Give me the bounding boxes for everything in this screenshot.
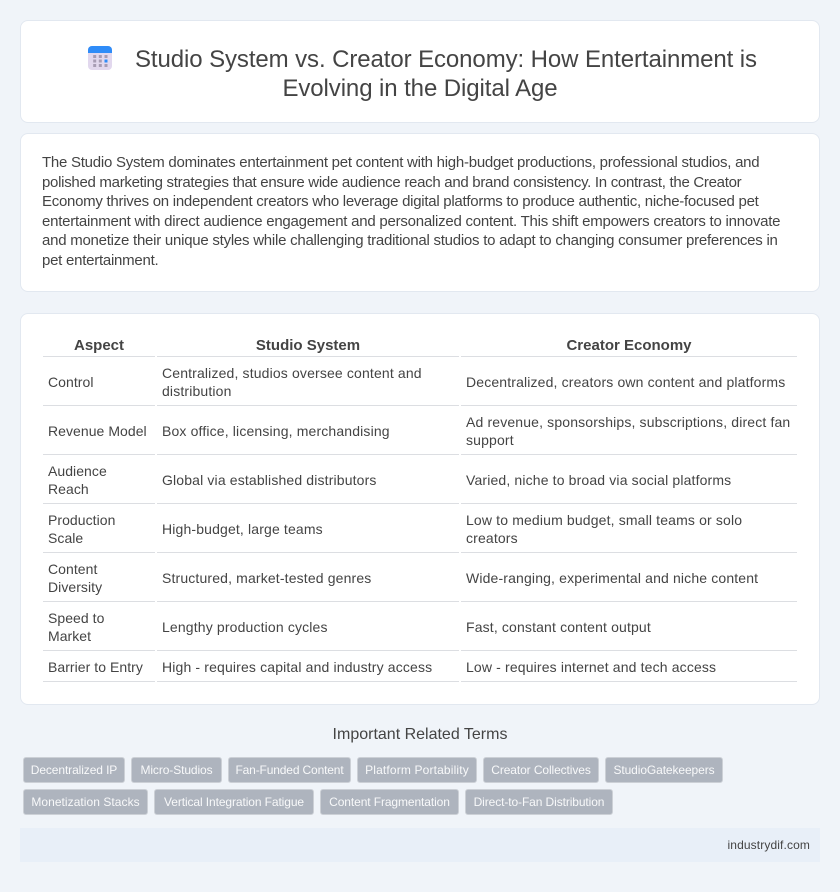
comparison table: Studio System xyxy=(256,337,360,354)
comparison table: Creator Economy xyxy=(566,337,692,354)
comparison table: Varied, niche to broad via social platforms xyxy=(466,472,731,488)
comparison table: support xyxy=(466,432,514,448)
comparison table: Fast, constant content output xyxy=(466,618,651,634)
comparison table: Box office, licensing, merchandising xyxy=(162,422,390,438)
intro paragraph: and monetize their unique styles while challenging traditional studios to adapt to changing consumer preferences in xyxy=(42,232,778,249)
comparison table: Aspect xyxy=(74,337,124,354)
intro paragraph: pet entertainment. xyxy=(42,252,158,268)
heading: related terms: Important Related Terms xyxy=(333,726,507,743)
title xyxy=(135,46,757,102)
tag group: related terms: StudioGatekeepers xyxy=(613,763,715,777)
comparison table: Content xyxy=(48,560,97,576)
comparison table: Structured, market-tested genres xyxy=(162,570,371,586)
panel: introduction xyxy=(20,133,820,292)
footer bar: industrydif.com xyxy=(728,838,810,852)
comparison table: Production xyxy=(48,512,115,528)
comparison table: Revenue Model xyxy=(48,422,147,438)
tag group: related terms: Content Fragmentation xyxy=(329,795,450,809)
comparison table: Diversity xyxy=(48,578,102,594)
comparison table: Speed to xyxy=(48,610,104,626)
comparison table: Reach xyxy=(48,480,89,496)
tag group: related terms: Monetization Stacks xyxy=(31,795,140,809)
comparison table: Barrier to Entry xyxy=(48,658,143,674)
title: Studio System vs. Creator Economy: How Entertainment is xyxy=(135,46,757,73)
icon: calendar xyxy=(88,46,112,70)
comparison table: Audience xyxy=(48,462,107,478)
intro paragraph: entertainment with direct audience engagement and personalized content. This shift empowers creators to innovate xyxy=(42,212,780,230)
tag group: related terms: Micro-Studios xyxy=(140,763,213,777)
panel: comparison table xyxy=(20,313,820,705)
comparison table: High - requires capital and industry access xyxy=(162,658,432,674)
comparison table: Market xyxy=(48,628,91,644)
comparison table: Lengthy production cycles xyxy=(162,618,328,634)
title: Evolving in the Digital Age xyxy=(282,75,558,102)
panel: header xyxy=(20,20,820,123)
intro paragraph: The Studio System dominates entertainment pet content with high-budget productions, professional studios, and xyxy=(42,154,759,171)
tag group: related terms: Platform Portability xyxy=(365,763,469,777)
tag group: related terms: Fan-Funded Content xyxy=(235,763,344,777)
comparison table xyxy=(43,337,797,682)
tag group: related terms: Direct-to-Fan Distribution xyxy=(474,795,604,809)
comparison table: Global via established distributors xyxy=(162,472,377,488)
tag group: related terms xyxy=(23,757,723,815)
comparison table: creators xyxy=(466,530,518,546)
intro paragraph: Economy thrives on independent creators who leverage digital platforms to produce authentic, niche-focused pet xyxy=(42,193,759,210)
comparison table: Decentralized, creators own content and platforms xyxy=(466,374,785,390)
comparison table: Low - requires internet and tech access xyxy=(466,658,716,674)
footer bar xyxy=(20,828,820,862)
comparison table: Low to medium budget, small teams or solo xyxy=(466,512,742,528)
tag group: related terms: Creator Collectives xyxy=(491,763,591,777)
intro paragraph xyxy=(42,154,780,268)
comparison table: Scale xyxy=(48,530,83,546)
intro paragraph: polished marketing strategies that ensure wide audience reach and brand consistency. In contrast, the Creator xyxy=(42,174,741,190)
tag group: related terms: Vertical Integration Fatigue xyxy=(164,795,304,809)
comparison table: distribution xyxy=(162,382,232,398)
tag group: related terms: Decentralized IP xyxy=(31,763,117,777)
comparison table: Ad revenue, sponsorships, subscriptions, direct fan xyxy=(466,414,790,430)
comparison table: High-budget, large teams xyxy=(162,520,323,536)
comparison table: Centralized, studios oversee content and xyxy=(162,364,422,380)
comparison table: Control xyxy=(48,374,93,390)
comparison table: Wide-ranging, experimental and niche content xyxy=(466,570,758,586)
